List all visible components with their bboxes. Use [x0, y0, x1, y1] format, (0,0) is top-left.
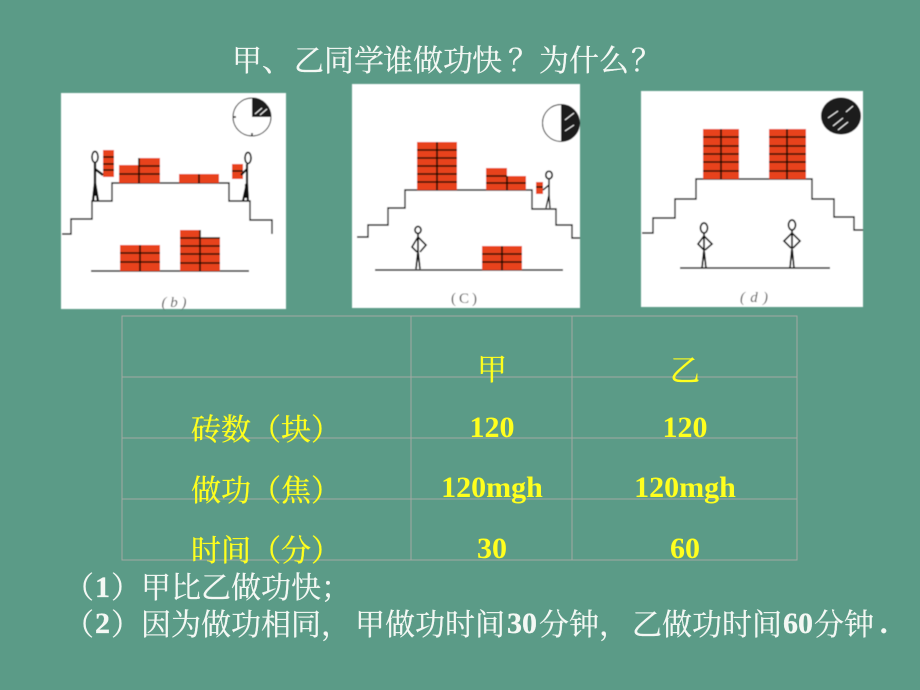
- answer 2: 分钟，乙做功时间: [539, 609, 782, 642]
- row: work: 120mgh: [634, 471, 736, 504]
- icon: clock b: [233, 98, 271, 136]
- icon: clock d: [821, 98, 861, 134]
- row: bricks: 120: [662, 411, 708, 444]
- table: [122, 316, 797, 568]
- panel: figure d, all bricks moved in 60 minutes: [641, 91, 863, 307]
- figure: worker right b: [241, 152, 251, 201]
- title: 甲、乙同学谁做功快？为什么？: [232, 45, 661, 78]
- panel: figure b, half the bricks moved in 15 minutes: [61, 93, 286, 311]
- table header: [477, 354, 700, 388]
- figure: worker left b: [92, 152, 103, 201]
- figure: standing right d: [784, 220, 800, 268]
- answer 2: 30: [507, 607, 537, 640]
- figure: standing left d: [698, 223, 712, 268]
- table header: 甲: [477, 354, 507, 387]
- answer 2: ）因为做功相同，甲做功时间: [111, 609, 505, 642]
- row: bricks: 120: [470, 411, 514, 444]
- answer 2: .: [880, 607, 888, 640]
- caption b: (b): [162, 295, 186, 311]
- row: time: [191, 532, 700, 568]
- figure: standing left c: [412, 226, 426, 269]
- figure: worker right c: [543, 171, 552, 208]
- answer 2: 2: [95, 607, 110, 640]
- row: work: 120mgh: [441, 471, 543, 504]
- row: bricks: [191, 411, 708, 447]
- answer 2: （: [64, 609, 94, 642]
- panel: figure c, half the bricks moved in 30 minutes: [352, 84, 580, 308]
- answer 2: 60: [783, 607, 813, 640]
- answer 1: ）甲比乙做功快；: [111, 572, 351, 605]
- row: bricks: 砖数（块）: [191, 414, 341, 447]
- answer 1: 1: [95, 571, 110, 604]
- icon: clock c: [542, 104, 580, 142]
- row: time: 30: [477, 532, 507, 565]
- answer 1: （: [64, 572, 94, 605]
- table header: 乙: [670, 355, 700, 388]
- row: time: 60: [670, 532, 700, 565]
- row: work: [191, 471, 736, 508]
- caption d: (d): [740, 290, 768, 306]
- answer 2: 分钟: [814, 609, 874, 642]
- row: work: 做功（焦）: [191, 475, 341, 508]
- row: time: 时间（分）: [191, 535, 341, 568]
- caption c: (C): [451, 291, 477, 307]
